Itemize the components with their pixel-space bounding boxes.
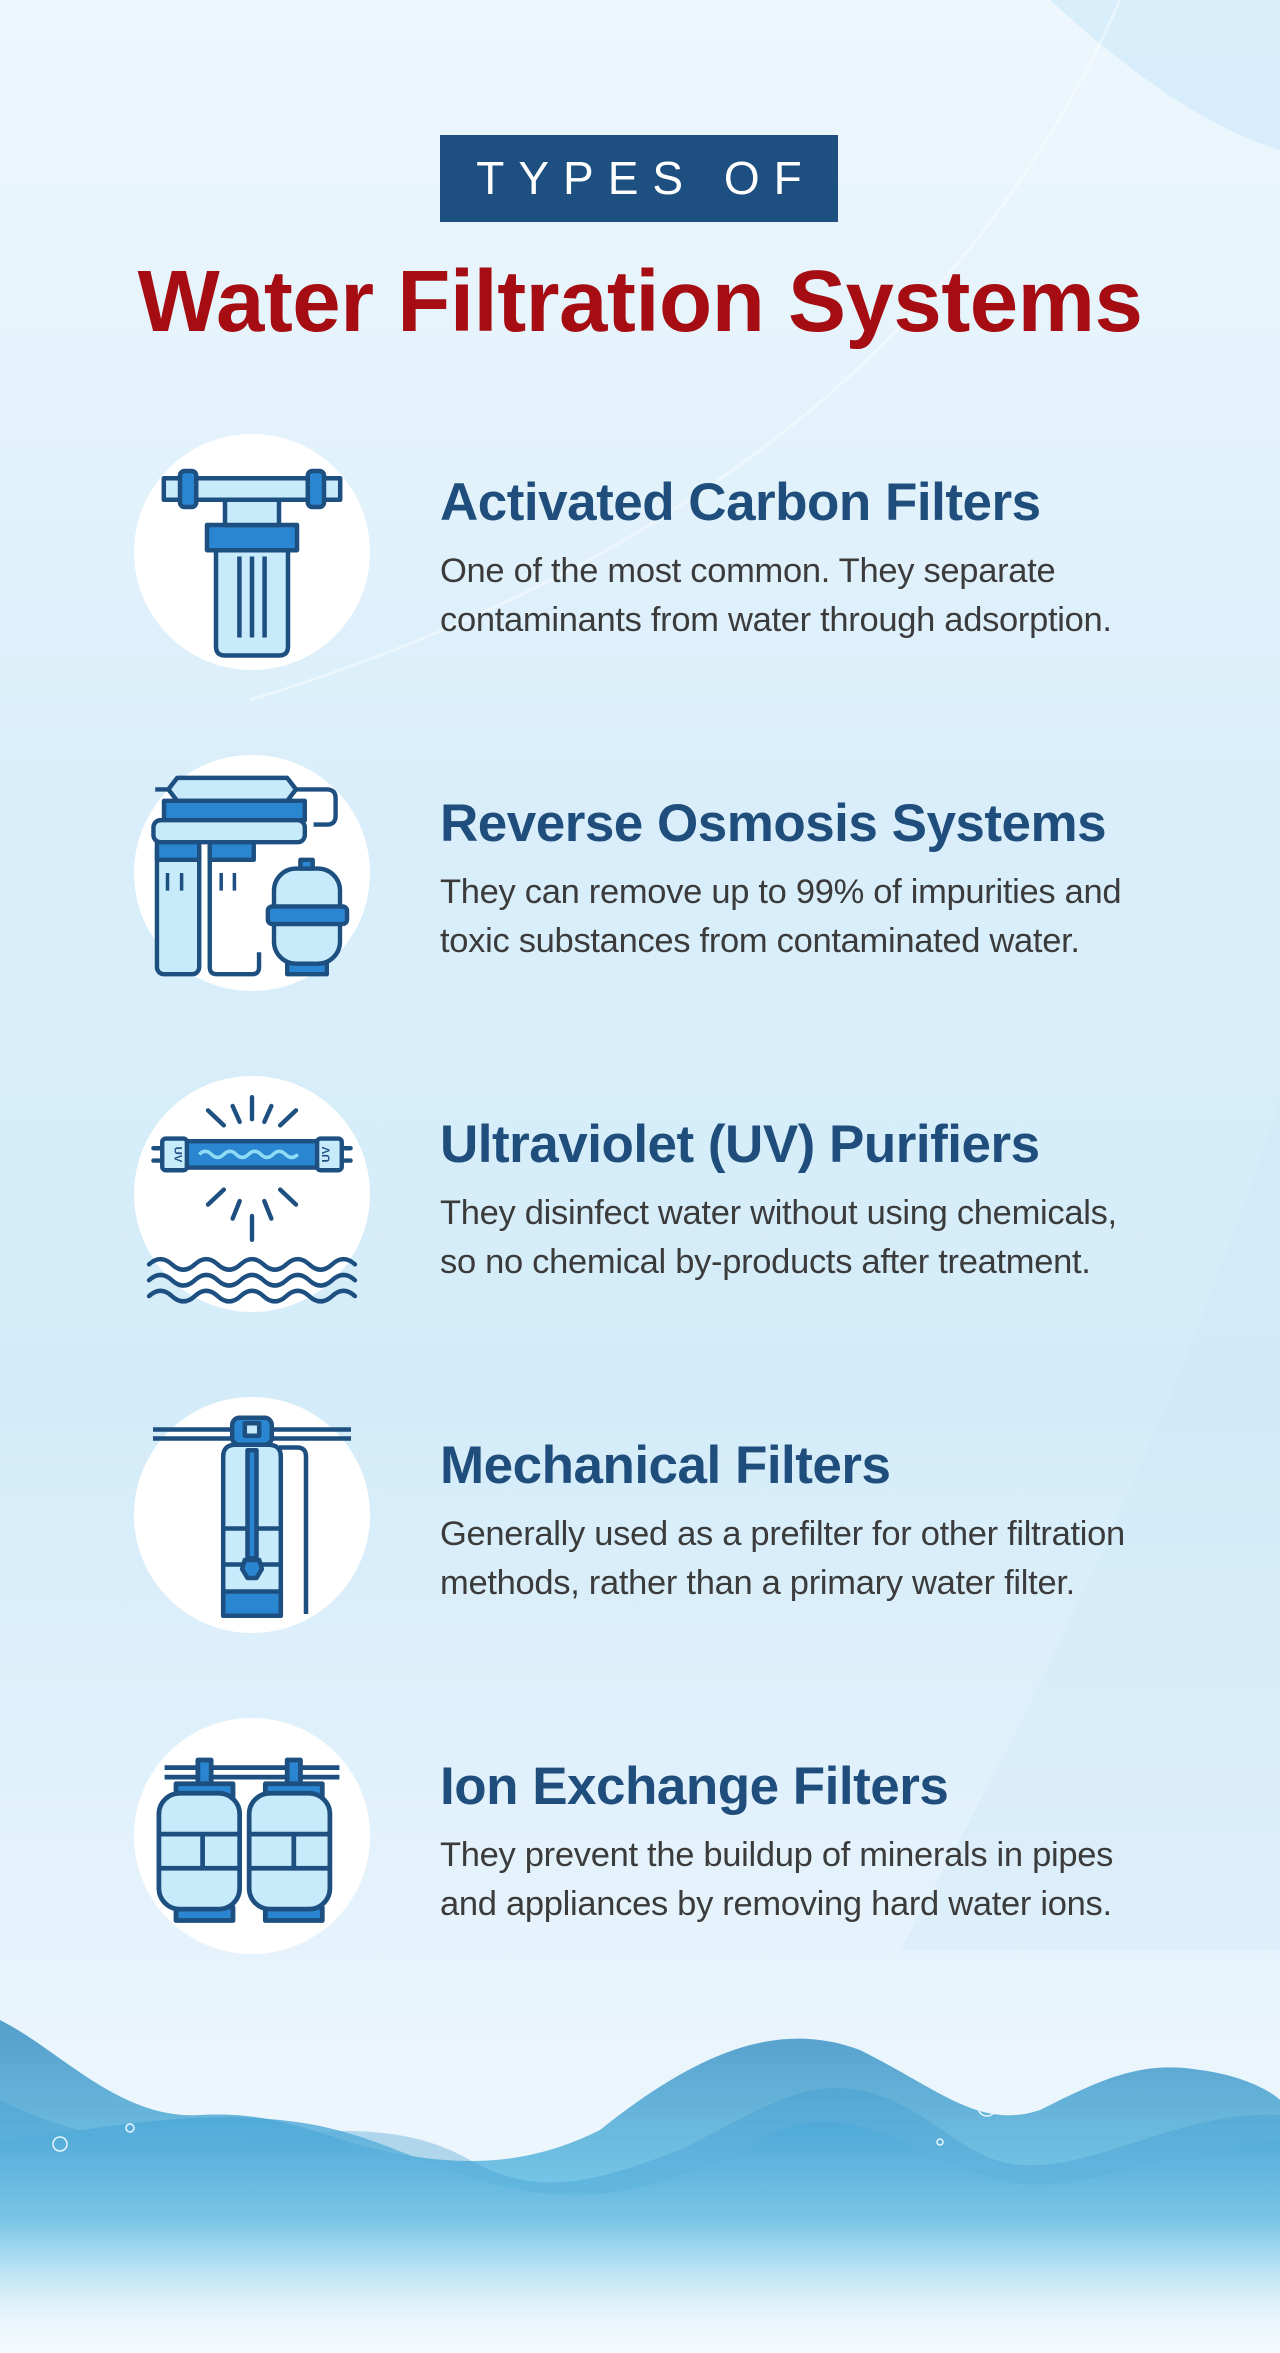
item 3: UV (134, 1076, 1117, 1312)
text (440, 1836, 1113, 1923)
heading: Activated Carbon Filters (440, 473, 1041, 532)
icon: RO system (134, 755, 370, 991)
heading: Reverse Osmosis Systems (440, 794, 1106, 853)
item 1: activated carbon (134, 434, 1112, 670)
text: They can remove up to 99% of impurities and (440, 873, 1121, 911)
heading: Ultraviolet (UV) Purifiers (440, 1115, 1040, 1174)
item 4: mechanical (134, 1397, 1125, 1633)
heading: Mechanical Filters (440, 1436, 891, 1495)
text (440, 1515, 1125, 1602)
text: They prevent the buildup of minerals in pipes (440, 1836, 1113, 1874)
icon: mechanical filter (134, 1397, 370, 1633)
title badge: TYPES OF (440, 135, 838, 222)
text (440, 873, 1121, 960)
item 2: reverse osmosis (134, 755, 1121, 991)
text: so no chemical by-products after treatment. (440, 1243, 1091, 1281)
text: and appliances by removing hard water ions. (440, 1885, 1112, 1923)
item 5: ion exchange (134, 1718, 1113, 1954)
text: One of the most common. They separate (440, 552, 1055, 590)
text: Generally used as a prefilter for other filtration (440, 1515, 1125, 1553)
icon: carbon filter (134, 434, 370, 670)
icon: UV lamp: UV (320, 1146, 332, 1162)
text: toxic substances from contaminated water. (440, 922, 1080, 960)
text: methods, rather than a primary water filter. (440, 1564, 1075, 1602)
water waves (0, 2020, 1280, 2322)
icon: UV lamp (134, 1076, 370, 1312)
text: They disinfect water without using chemicals, (440, 1194, 1117, 1232)
text (440, 552, 1112, 639)
icon: ion exchange tanks (134, 1718, 370, 1954)
text (440, 1194, 1117, 1281)
icon: UV lamp: UV (172, 1146, 184, 1163)
heading: Ion Exchange Filters (440, 1757, 948, 1816)
title badge: TYPES OF: TYPES OF (476, 152, 816, 204)
title: Water Filtration Systems (138, 253, 1142, 350)
text: contaminants from water through adsorption. (440, 601, 1112, 639)
